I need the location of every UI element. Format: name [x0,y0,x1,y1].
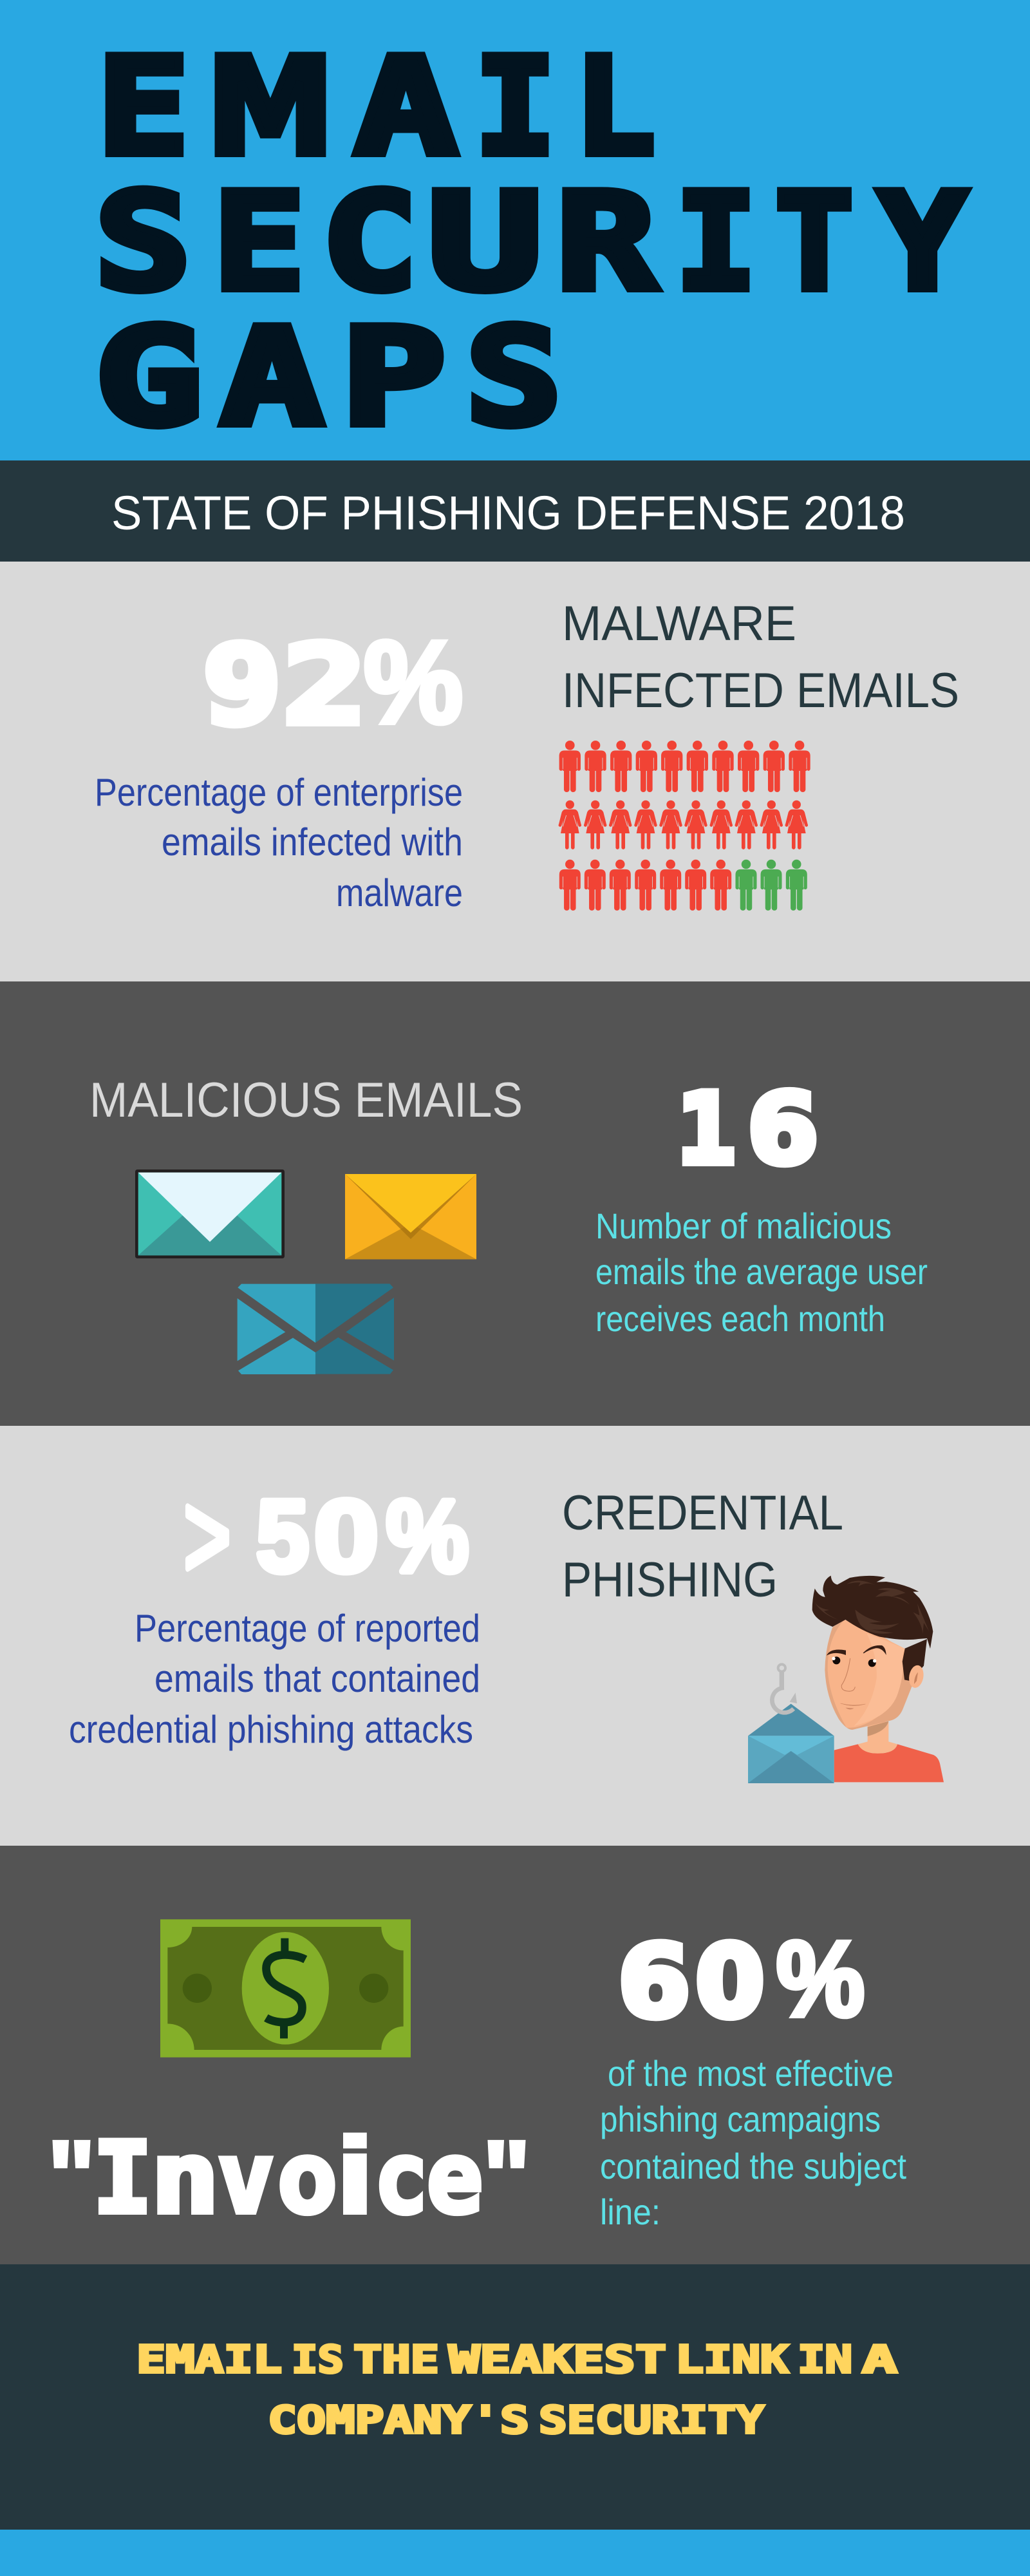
quote: "Invoice": n [151,2121,220,2236]
heading: credential phishing [562,1486,843,1607]
quote: "Invoice": " [482,2119,531,2234]
closing text: WEAKEST [449,2337,666,2382]
quote: "Invoice": " [47,2119,96,2234]
description: enterprise emails: emails infected with [162,820,463,864]
title: P [341,300,446,456]
title: T [775,165,854,321]
panel: title header [0,0,1030,460]
stat: greater than 50%: > [183,1468,231,1604]
heading: malware infected emails: MALWARE [562,596,796,651]
description: phishing campaigns [600,2053,906,2232]
stat: 60%: % [776,1920,865,2039]
title [95,30,967,456]
closing text: A [862,2337,897,2382]
title: E [97,30,189,185]
description: reported emails [69,1607,480,1751]
description: enterprise emails: malware [336,871,463,914]
title: L [574,30,655,185]
stat: greater than 50%: % [386,1479,469,1593]
quote: "Invoice": I [93,2121,153,2236]
description: phishing campaigns: line: [600,2192,660,2232]
icon: man with hooked envelope [748,1576,944,1783]
quote: "Invoice": i [337,2116,373,2235]
heading: credential phishing: PHISHING [562,1553,778,1607]
icon: yellow envelope [345,1174,476,1259]
icon: teal envelope [135,1170,285,1258]
panel: invoice subject line [0,1846,1030,2264]
title: G [95,300,203,456]
heading: credential phishing: CREDENTIAL [562,1486,843,1540]
quote: "Invoice": c [374,2121,428,2236]
description: malicious emails per month: Number of malicious [595,1206,892,1246]
heading: malicious emails: MALICIOUS EMAILS [89,1073,523,1128]
closing text: SECURITY [539,2398,765,2442]
closing text: IN [798,2337,852,2382]
title: U [427,165,543,321]
title: S [95,165,191,321]
description: phishing campaigns: contained the subject [600,2146,906,2186]
panel: malicious emails [0,981,1030,1426]
stat: 60%: 6 [618,1925,690,2040]
icon: blue envelope [238,1283,394,1374]
description: malicious emails per month [595,1206,928,1339]
title: Y [878,165,967,321]
heading: malware infected emails [562,596,959,718]
quote: "Invoice": v [218,2121,274,2236]
panel: malware infected emails [0,562,1030,981]
closing text: IS [292,2337,344,2382]
panel: subtitle band [0,460,1030,562]
closing text: EMAIL [136,2337,282,2382]
description: phishing campaigns: phishing campaigns [600,2099,881,2139]
panel: credential phishing [0,1426,1030,1846]
heading: malware infected emails: INFECTED EMAILS [562,663,959,718]
closing text [136,2337,897,2442]
stat: 16: 6 [747,1074,818,1186]
description: reported emails: credential phishing attacks [69,1708,473,1751]
stat: 92%: 2 [283,622,366,748]
title: M [207,30,334,185]
quote: "Invoice": e [427,2121,483,2236]
icon: dollar bill [160,1919,411,2058]
subtitle: STATE OF PHISHING DEFENSE 2018 [111,486,905,540]
stat: 92%: 9 [203,622,281,748]
closing text: COMPANY'S [268,2398,529,2442]
title: C [321,165,418,321]
title: E [213,165,305,321]
stat: 60%: 0 [696,1925,764,2040]
pictogram: 92 of 100 people infected [559,741,810,911]
closing text: LINK [675,2337,789,2382]
bottom band [0,2530,1030,2576]
title: R [556,165,657,321]
panel: closing statement [0,2264,1030,2530]
description: reported emails: emails that contained [154,1657,480,1700]
title: I [474,30,556,185]
description: reported emails: Percentage of reported [135,1607,480,1650]
description: enterprise emails [95,771,463,914]
title: A [354,30,458,185]
quote: "Invoice": o [277,2121,337,2236]
title: S [465,300,562,456]
description: phishing campaigns: of the most effective [608,2053,894,2094]
description: malicious emails per month: emails the average user [595,1251,928,1292]
title: I [675,165,757,321]
closing text: THE [353,2337,439,2382]
stat: greater than 50%: 0 [314,1479,379,1593]
description: enterprise emails: Percentage of enterprise [95,771,463,814]
title: A [220,300,324,456]
stat: 16: 1 [677,1074,735,1186]
description: malicious emails per month: receives each month [595,1298,885,1339]
stat: 92%: % [364,616,463,748]
stat: greater than 50%: 5 [256,1479,309,1593]
